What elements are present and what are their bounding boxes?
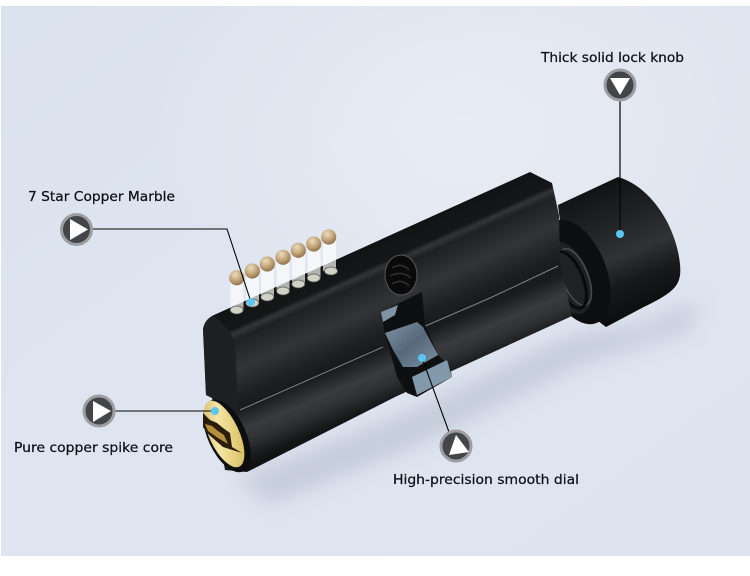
marble dot: [247, 298, 255, 306]
knob leader line: [619, 100, 621, 234]
key cylinder cap: [193, 393, 261, 479]
marble label: 7 Star Copper Marble: [28, 189, 175, 205]
core dot: [211, 407, 219, 415]
keyway: [203, 413, 242, 453]
body edge highlight: [240, 266, 558, 410]
core icon: [84, 396, 114, 426]
marble icon: [62, 214, 92, 244]
dial cam: [385, 322, 438, 367]
knob label: Thick solid lock knob: [540, 50, 684, 66]
marble leader line: [92, 229, 251, 302]
dial cam tail: [412, 360, 452, 395]
dial dot: [418, 354, 426, 362]
lower cylinder: [212, 262, 572, 472]
notch steel plate: [381, 305, 398, 322]
upper lock body: [203, 172, 560, 411]
knob dot: [616, 230, 624, 238]
marble holes: [230, 267, 338, 314]
end face of body: [203, 316, 238, 411]
screw hole: [385, 255, 417, 295]
dial notch: [381, 292, 452, 397]
marble pin columns: [230, 237, 336, 310]
dial leader line: [422, 358, 449, 432]
knob neck: [534, 235, 602, 321]
cast shadow: [235, 300, 700, 505]
brass key core: [195, 395, 253, 473]
knob collar: [528, 210, 624, 334]
marble balls: [229, 229, 336, 285]
lock knob: [558, 177, 680, 327]
core leader line: [114, 410, 212, 412]
knob icon: [605, 70, 635, 100]
dial icon: [441, 431, 471, 461]
core label: Pure copper spike core: [14, 440, 173, 456]
callout: dial: [393, 354, 579, 488]
dial label: High-precision smooth dial: [393, 472, 579, 488]
callout: core: [14, 396, 219, 456]
callout: marble: [28, 189, 255, 306]
lock cylinder illustration: [193, 172, 680, 479]
seven copper marbles: [229, 229, 338, 314]
callout: knob: [540, 50, 684, 238]
